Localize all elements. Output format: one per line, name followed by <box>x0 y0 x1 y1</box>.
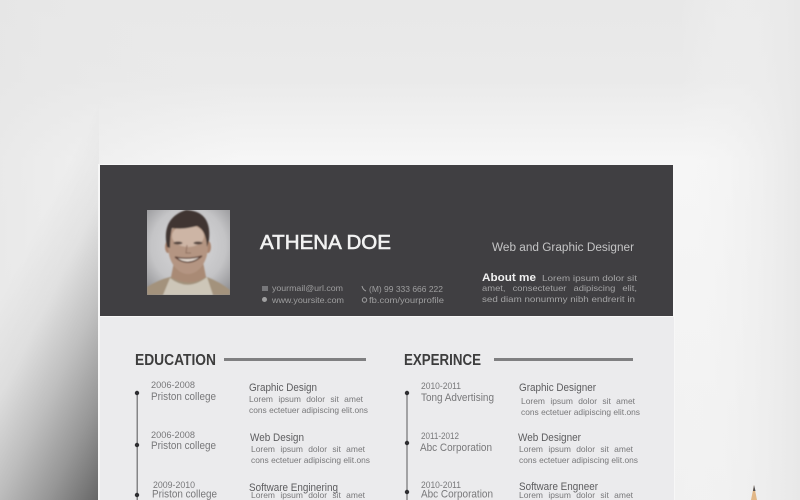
entry: experience 3: Lorem ipsum dolor sit amet <box>519 490 634 500</box>
about me: sed diam nonummy nibh endrerit in <box>482 294 635 304</box>
entry: experience 3 <box>421 480 634 500</box>
entry: education 1: cons ectetuer adipiscing elit.ons <box>249 405 368 415</box>
icon: mail <box>262 286 268 291</box>
entry: education 1 <box>151 380 368 415</box>
entry: education 2: 2006-2008 <box>151 430 195 441</box>
entry: education 2 <box>151 430 370 465</box>
entry: experience 2: 2011-2012 <box>421 431 459 442</box>
about me: Lorem ipsum dolor sit <box>542 273 638 283</box>
entry: experience 2: Web Designer <box>518 432 581 444</box>
timeline <box>135 391 139 500</box>
entry: experience 2: cons ectetuer adipiscing elit.ons <box>519 455 638 465</box>
entry: education 2: Lorem ipsum dolor sit amet <box>251 444 366 454</box>
entry: education 3: 2009-2010 <box>153 480 195 491</box>
entry: education 3 <box>152 480 366 500</box>
entry: education 1: 2006-2008 <box>151 380 195 391</box>
panel: experience <box>404 352 640 500</box>
contact details: www.yoursite.com <box>271 295 344 305</box>
entry: experience 3: 2010-2011 <box>421 480 461 491</box>
entry: experience 1: 2010-2011 <box>421 381 461 392</box>
entry: experience 3: Software Engneer <box>519 481 598 493</box>
about me: amet, consectetuer adipiscing elit, <box>482 283 637 293</box>
icon: facebook <box>362 298 367 302</box>
icon: phone <box>362 286 366 291</box>
entry: experience 1: Lorem ipsum dolor sit amet <box>521 396 636 406</box>
sheet body <box>100 317 674 500</box>
name: ATHENA DOE <box>260 231 391 254</box>
heading: education: EDUCATION <box>135 352 216 369</box>
sheet edge <box>98 164 675 500</box>
entry: education 3: Lorem ipsum dolor sit amet <box>251 490 366 500</box>
sheet shadow <box>0 0 99 500</box>
entry: education 2: Priston college <box>151 440 216 452</box>
entry: experience 2: Abc Corporation <box>420 442 492 454</box>
entry: education 1: Priston college <box>151 391 216 403</box>
entry: education 1: Lorem ipsum dolor sit amet <box>249 394 364 404</box>
entry: education 1: Graphic Design <box>249 382 317 394</box>
entry: experience 2 <box>420 431 638 465</box>
icon: globe <box>262 297 267 302</box>
contact details: fb.com/yourprofile <box>369 295 444 305</box>
resume sheet <box>98 164 675 500</box>
about me: About me <box>482 272 536 284</box>
icon: pencil tip <box>751 485 757 500</box>
entry: experience 1: cons ectetuer adipiscing elit.ons <box>521 407 640 417</box>
timeline <box>405 391 409 500</box>
entry: education 2: cons ectetuer adipiscing elit.ons <box>251 455 370 465</box>
entry: experience 1 <box>421 381 640 417</box>
header band <box>100 165 673 316</box>
panel: education <box>135 352 370 500</box>
entry: education 3: Software Enginering <box>249 482 338 494</box>
contact details: yourmail@url.com <box>272 283 343 293</box>
entry: experience 2: Lorem ipsum dolor sit amet <box>519 444 634 454</box>
about me <box>482 272 638 304</box>
profile photo <box>147 210 230 295</box>
entry: experience 1: Graphic Designer <box>519 382 596 394</box>
contact details: (M) 99 333 666 222 <box>369 284 443 294</box>
entry: experience 1: Tong Advertising <box>421 392 494 404</box>
heading: experience: EXPERINCE <box>404 352 481 369</box>
contact details <box>262 283 444 305</box>
job title: Web and Graphic Designer <box>492 242 634 254</box>
entry: education 2: Web Design <box>250 432 304 444</box>
